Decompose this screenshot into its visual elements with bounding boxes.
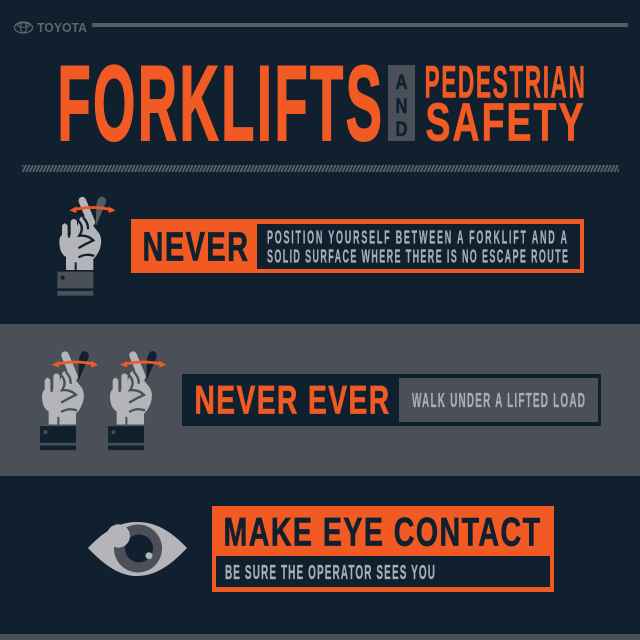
make eye contact description: BE SURE THE OPERATOR SEES YOU [225, 563, 435, 584]
icon: crossed fingers left hand [40, 351, 98, 450]
and badge: N [396, 95, 408, 118]
bottom gray strip [0, 634, 640, 640]
double arrow [69, 206, 116, 213]
toyota logo: TOYOTA [37, 20, 88, 35]
cuff [57, 272, 93, 296]
and badge: D [396, 118, 408, 141]
gray band [0, 324, 640, 476]
never description [267, 228, 568, 268]
panel: never: NEVER [142, 223, 250, 269]
never description: POSITION YOURSELF BETWEEN A FORKLIFT AND A [267, 228, 567, 249]
panel: make eye contact [212, 506, 554, 592]
icon: crossed fingers hand [57, 197, 116, 296]
icon: eye [88, 522, 187, 576]
never description: SOLID SURFACE WHERE THERE IS NO ESCAPE ROUTE [267, 247, 568, 268]
and badge [388, 65, 415, 141]
icon: crossed fingers right hand [108, 351, 166, 450]
hatched divider [22, 165, 619, 172]
and badge: A [396, 71, 408, 94]
header rule [92, 23, 628, 27]
panel: never [131, 219, 584, 273]
toyota logo [14, 20, 88, 35]
never ever description: WALK UNDER A LIFTED LOAD [412, 391, 585, 412]
